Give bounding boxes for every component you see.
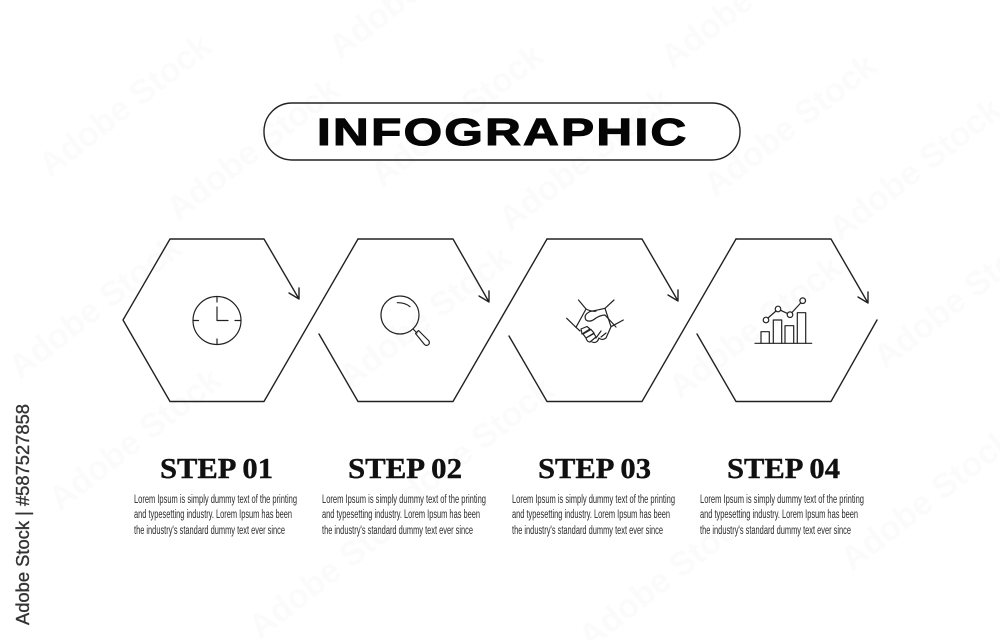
panel: hexagon step 1 <box>123 239 358 402</box>
body text: step 3 <box>512 494 675 537</box>
text block: step 3 <box>512 453 675 537</box>
body text: step 3: the industry's standard dummy text ever since <box>512 525 663 537</box>
panel: hexagon step 2 <box>319 239 547 402</box>
stock image id label: Adobe Stock | #587527858 <box>13 404 33 625</box>
body text: step 1: and typesetting industry. Lorem Ipsum has been <box>134 509 292 521</box>
watermark pattern: Adobe Stock <box>374 370 561 528</box>
text block: step 4 <box>700 453 864 537</box>
body text: step 4: the industry's standard dummy text ever since <box>700 525 851 537</box>
title pill <box>264 103 740 160</box>
title text: INFOGRAPHIC <box>317 111 686 154</box>
body text: step 2: Lorem Ipsum is simply dummy text of the printing <box>322 494 486 506</box>
text block: step 2 <box>322 453 486 537</box>
watermark pattern: Adobe Stock <box>662 248 849 406</box>
heading: step 03: STEP 03 <box>538 453 651 485</box>
body text: step 3: and typesetting industry. Lorem Ipsum has been <box>512 509 670 521</box>
hexagon outline 1 with arrow <box>123 239 358 402</box>
text block: step 1 <box>134 453 297 537</box>
watermark pattern: Adobe Stock <box>32 26 219 184</box>
body text: step 3: Lorem Ipsum is simply dummy text of the printing <box>512 494 675 506</box>
watermark pattern: Adobe Stock <box>332 238 519 396</box>
hexagon outline 2 with arrow <box>319 239 547 402</box>
watermark pattern: Adobe Stock <box>160 70 347 228</box>
icon: clock <box>193 296 241 344</box>
heading: step 01: STEP 01 <box>160 453 273 485</box>
heading: step 02: STEP 02 <box>348 453 462 485</box>
hexagon outline 4 with arrow <box>697 239 877 402</box>
hexagon outline 3 with arrow <box>509 239 736 402</box>
icon: magnifying glass <box>381 296 429 345</box>
watermark pattern: Adobe Stock <box>2 228 189 386</box>
icon: handshake <box>567 300 623 342</box>
body text: step 2: the industry's standard dummy text ever since <box>322 525 473 537</box>
body text: step 1 <box>134 494 297 537</box>
body text: step 1: the industry's standard dummy text ever since <box>134 525 285 537</box>
body text: step 2: and typesetting industry. Lorem Ipsum has been <box>322 509 480 521</box>
body text: step 4: Lorem Ipsum is simply dummy text of the printing <box>700 494 864 506</box>
watermark pattern: Adobe Stock <box>42 360 229 518</box>
body text: step 4 <box>700 494 864 537</box>
heading: step 04: STEP 04 <box>727 453 840 485</box>
watermark pattern: Adobe Stock <box>364 36 551 194</box>
panel: hexagon step 4 <box>697 239 877 402</box>
panel: hexagon step 3 <box>509 239 736 402</box>
body text: step 4: and typesetting industry. Lorem Ipsum has been <box>700 509 858 521</box>
body text: step 1: Lorem Ipsum is simply dummy text of the printing <box>134 494 297 506</box>
body text: step 2 <box>322 494 486 537</box>
watermark pattern: Adobe Stock <box>492 80 679 238</box>
icon: bar chart <box>755 298 812 343</box>
watermark pattern: Adobe Stock <box>697 46 884 204</box>
